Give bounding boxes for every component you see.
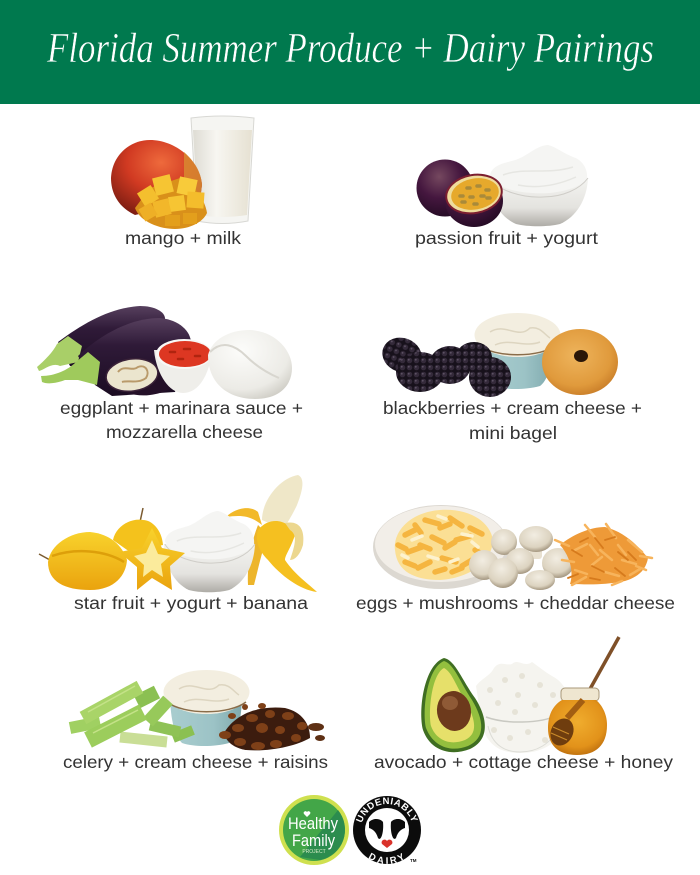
icon: marinara sauce bowl: [154, 339, 212, 393]
panel: eggplant + marinara sauce + mozzarella cheese: [37, 306, 303, 442]
label: celery + cream cheese + raisins: [63, 752, 328, 772]
icon: cottage cheese bowl: [476, 662, 567, 753]
icon: eggplant: [37, 306, 191, 396]
icon: blackberries: [377, 332, 511, 397]
label: mini bagel: [469, 423, 557, 443]
icon: passion fruit: [416, 160, 506, 227]
panel: passion fruit + yogurt: [415, 145, 598, 248]
icon: celery: [70, 686, 193, 742]
title banner: [0, 0, 700, 104]
label: [383, 398, 642, 443]
logo: Undeniably Dairy: TM: [410, 858, 417, 863]
panel: eggs + mushrooms + cheddar cheese: [356, 505, 675, 613]
icon: mozzarella: [208, 330, 292, 399]
label: eggplant + marinara sauce +: [60, 398, 303, 418]
icon: cream cheese bowl: [474, 313, 560, 389]
icon: cream cheese bowl: [164, 670, 250, 746]
label: passion fruit + yogurt: [415, 228, 598, 248]
logo: Undeniably Dairy: UNDENIABLY: [356, 798, 418, 822]
icon: yogurt bowl: [489, 145, 588, 226]
icon: mushrooms: [469, 526, 574, 590]
icon: star fruit: [39, 508, 185, 590]
icon: cow face: [369, 819, 405, 848]
icon: mango: [111, 140, 207, 229]
icon: raisins: [219, 703, 325, 750]
logo: Healthy Family Project: PROJECT: [302, 849, 326, 855]
label: avocado + cottage cheese + honey: [374, 752, 673, 772]
logo: Healthy Family Project: [279, 795, 349, 865]
icon: honey jar and dipper: [546, 637, 619, 755]
icon: shredded cheddar: [555, 524, 652, 585]
icon: avocado: [421, 658, 485, 752]
logo: Healthy Family Project: Healthy: [288, 814, 338, 833]
label: star fruit + yogurt + banana: [74, 593, 308, 613]
panel: blackberries + cream cheese + mini bagel: [377, 313, 642, 443]
label: blackberries + cream cheese +: [383, 398, 642, 418]
label: [60, 398, 303, 442]
icon: mini bagel: [542, 329, 618, 395]
panel: mango + milk: [111, 116, 254, 248]
icon: banana: [226, 475, 317, 592]
icon: glass of milk: [191, 116, 254, 224]
icon: yogurt bowl: [164, 511, 255, 592]
icon: scrambled eggs on plate: [373, 505, 509, 589]
logo: Undeniably Dairy: DAIRY: [368, 852, 403, 864]
label: eggs + mushrooms + cheddar cheese: [356, 593, 675, 613]
panel: star fruit + yogurt + banana: [39, 475, 317, 613]
panel: celery + cream cheese + raisins: [63, 670, 328, 772]
label: mango + milk: [125, 228, 241, 248]
logo: Undeniably Dairy: [353, 796, 421, 864]
panel: avocado + cottage cheese + honey: [374, 637, 673, 772]
logo: Healthy Family Project: Family: [292, 831, 335, 850]
label: mozzarella cheese: [106, 422, 263, 442]
